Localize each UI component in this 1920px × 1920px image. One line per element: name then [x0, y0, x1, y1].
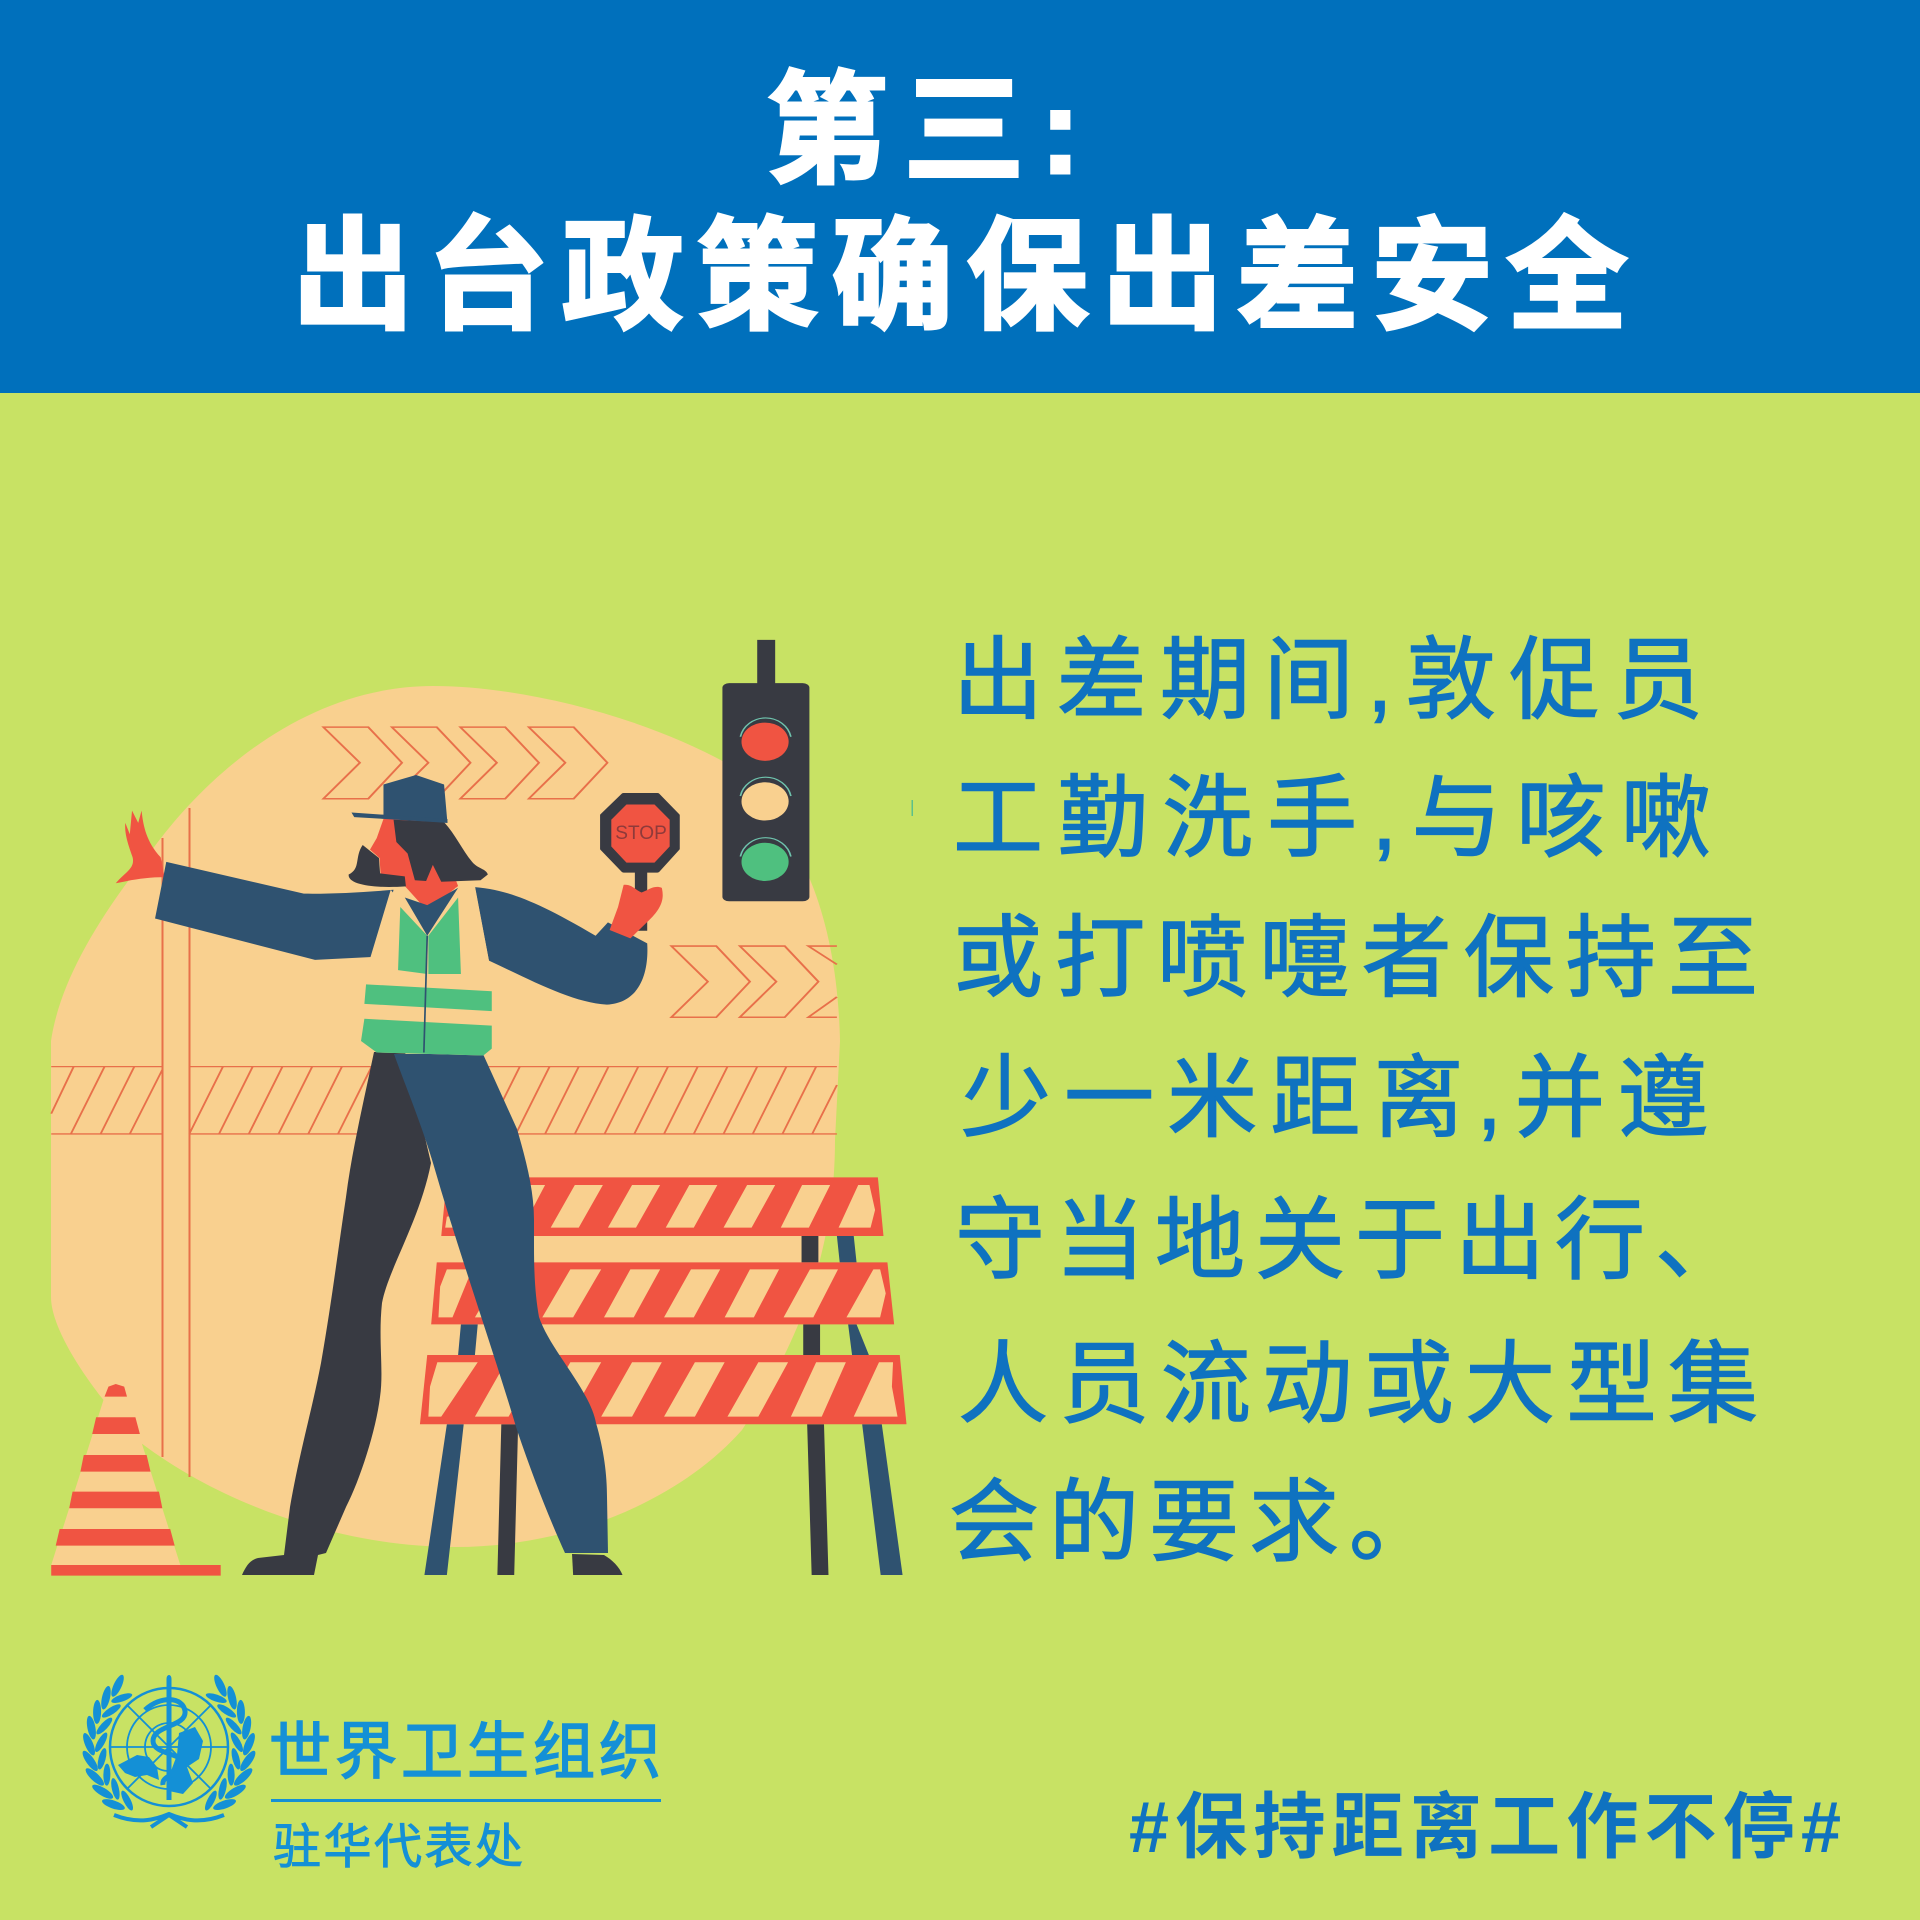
- small teal fleck: [912, 800, 913, 816]
- hashtag: #保持距离工作不停#: [1129, 1788, 1841, 1868]
- body text: 守当地关于出行、: [955, 1191, 1745, 1291]
- background peach blob: [51, 686, 840, 1547]
- emblem laurel right: [203, 1673, 258, 1812]
- emblem laurel left: [80, 1673, 135, 1812]
- background chevrons right: [671, 946, 837, 1017]
- emblem staff and serpent: [166, 1675, 172, 1800]
- worker front leg: [394, 1054, 608, 1553]
- body text: 少一米距离,并遵: [961, 1049, 1708, 1149]
- body text: 人员流动或大型集: [958, 1335, 1758, 1435]
- hatched road band: [51, 1067, 837, 1134]
- worker right shoe: [572, 1554, 623, 1575]
- middle board: [431, 1262, 894, 1324]
- traffic light: [722, 640, 809, 901]
- top board: [441, 1177, 883, 1236]
- emblem globe: [110, 1688, 228, 1806]
- header banner: [0, 0, 1920, 393]
- background posts: [162, 808, 190, 1477]
- illustration: traffic controller with barriers: [51, 640, 913, 1576]
- WHO emblem: [80, 1673, 258, 1827]
- logo divider: [271, 1799, 661, 1802]
- title line 2: 出台政策确保出差安全: [292, 209, 1628, 345]
- office name: 驻华代表处: [273, 1821, 523, 1874]
- organisation name: 世界卫生组织: [269, 1718, 661, 1787]
- hair: [349, 845, 406, 887]
- stop sign paddle: STOP: [615, 823, 667, 844]
- title line 1: 第三:: [766, 63, 1096, 199]
- background chevrons upper: [323, 727, 607, 799]
- barrier boards: [420, 1177, 906, 1424]
- barrier legs: [424, 1236, 903, 1575]
- worker upper body: [116, 775, 678, 1056]
- WHO logo: [80, 1673, 661, 1874]
- bottom board: [420, 1355, 906, 1424]
- emblem ribbon: [114, 1814, 224, 1827]
- worker dark leg: [242, 1052, 431, 1575]
- body text: [949, 631, 1758, 1573]
- stop sign paddle: [602, 795, 678, 938]
- safety vest: [361, 886, 492, 1056]
- hat: [383, 775, 447, 823]
- body text: 或打喷嚏者保持至: [953, 909, 1758, 1009]
- sleeves: [155, 862, 394, 960]
- emblem continents: [118, 1727, 203, 1794]
- body text: 会的要求。: [949, 1473, 1439, 1573]
- neck and face: [370, 819, 458, 911]
- traffic cone: [51, 1384, 221, 1576]
- raised hand: [116, 811, 165, 883]
- body text: 出差期间,敦促员: [953, 631, 1703, 731]
- body text: 工勤洗手,与咳嗽: [953, 769, 1711, 869]
